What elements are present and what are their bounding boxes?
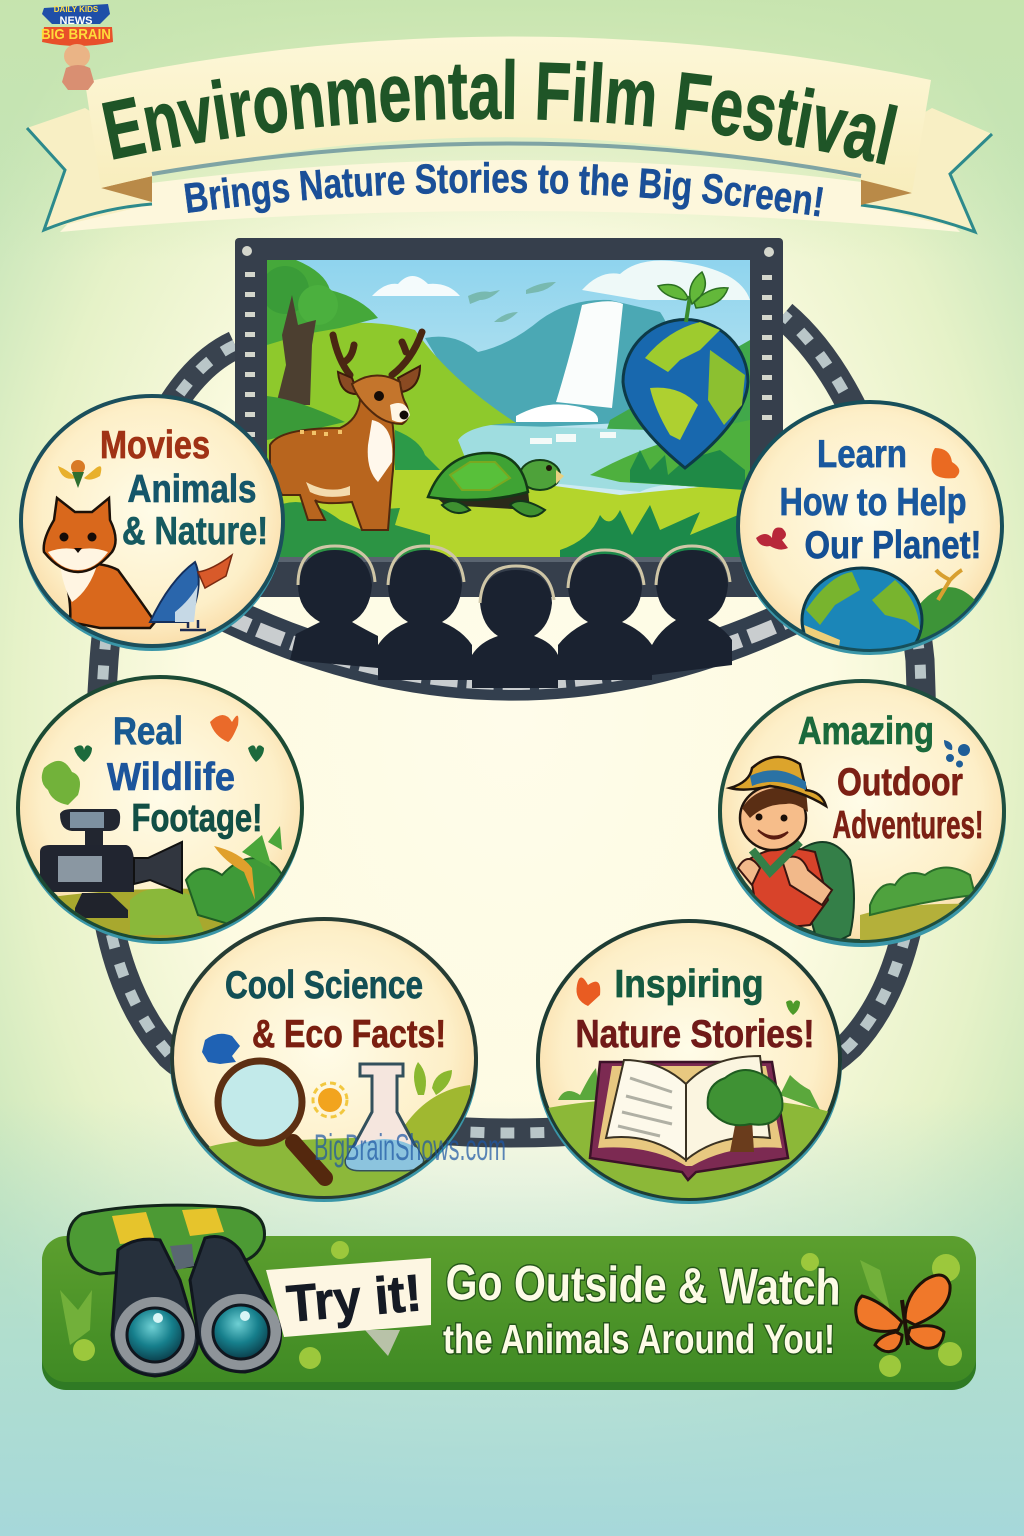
text: Learn <box>817 433 907 476</box>
turtle <box>428 453 564 516</box>
panel: learn how to help our planet <box>737 402 1003 672</box>
river <box>458 425 667 492</box>
panel: real wildlife footage: Wildlife <box>107 756 235 799</box>
icon: magnifier and flask <box>208 1058 470 1196</box>
text: Amazing <box>798 710 934 753</box>
ribbon shadow <box>152 143 861 176</box>
watermark: BigBrainShows.com <box>314 1127 506 1168</box>
logo: BIG BRAIN <box>41 26 111 43</box>
left yellow-green hill <box>267 322 516 470</box>
audience silhouettes <box>290 546 732 688</box>
panel: amazing outdoor adventures <box>718 681 1006 960</box>
header ribbon banner <box>26 36 993 235</box>
panel: cool science and eco facts <box>170 919 478 1220</box>
green band <box>42 1237 976 1390</box>
hiker head <box>730 757 826 850</box>
icon: fox and bird <box>44 460 232 630</box>
right green hill <box>607 340 750 487</box>
deer <box>270 332 422 530</box>
icon: young hiker <box>736 840 974 940</box>
foreground ferns <box>560 505 750 557</box>
icon: blue dots <box>944 740 970 768</box>
text: Inspiring <box>614 963 764 1006</box>
panel: real wildlife footage <box>17 677 303 960</box>
panel: movies animals and nature: & Nature! <box>122 510 268 553</box>
panel: amazing outdoor adventures: Outdoor <box>837 761 963 804</box>
cinema screen <box>235 238 783 688</box>
logo: DAILY KIDS <box>54 5 99 14</box>
lower film strip under the screen <box>225 613 800 682</box>
globe <box>623 272 748 468</box>
action text line one: Go Outside & Watch <box>445 1254 841 1316</box>
panel: movies animals and nature <box>20 396 284 651</box>
waterfall <box>556 301 623 408</box>
icon: orange heart <box>931 448 959 478</box>
ribbon body <box>85 36 931 193</box>
try it label: Try it! <box>284 1264 424 1334</box>
foliage <box>73 1241 962 1377</box>
panel: movies animals and nature: Animals <box>128 468 256 511</box>
icon: hearts <box>576 978 800 1015</box>
foam <box>516 404 598 422</box>
panel: inspiring nature stories <box>536 921 842 1220</box>
panel: learn how to help our planet: Our Planet! <box>804 524 982 567</box>
icon: red blob <box>756 527 788 550</box>
sprocket holes <box>242 246 774 437</box>
cream band behind subtitle <box>60 160 960 232</box>
ribbon folds <box>101 176 152 202</box>
call to action band <box>42 1205 976 1390</box>
birds <box>468 282 556 322</box>
icon: butterfly <box>856 1275 950 1352</box>
icon: blue butterfly <box>202 1034 240 1064</box>
text: Movies <box>100 424 210 467</box>
icon: leaf <box>42 761 80 805</box>
ribbon tail left <box>27 108 152 230</box>
logo <box>41 4 113 90</box>
icon: video camera <box>40 809 282 938</box>
icon: open book with tree <box>548 1055 828 1198</box>
clouds <box>372 276 460 296</box>
text: Cool Science <box>225 964 423 1007</box>
action text line two: the Animals Around You! <box>443 1316 835 1362</box>
screen bottom bar detail <box>267 557 750 562</box>
nature scene <box>261 260 750 557</box>
title: Environmental Film Festival <box>102 58 898 165</box>
left tree <box>261 260 378 440</box>
blue mountains <box>425 300 680 430</box>
panel: learn how to help our planet: How to Help <box>780 481 966 524</box>
ribbon tail right <box>861 108 992 232</box>
screen frame <box>235 238 783 597</box>
text: Real <box>113 710 183 753</box>
foreground meadow <box>267 465 750 557</box>
icon: globe and bushes <box>800 566 975 649</box>
icon: hearts <box>74 715 264 762</box>
icon: binoculars <box>68 1205 281 1376</box>
subtitle: Brings Nature Stories to the Big Screen! <box>184 162 824 216</box>
white rocks <box>530 432 616 444</box>
panel: cool science and eco facts: & Eco Facts! <box>252 1013 446 1056</box>
logo: NEWS <box>60 15 92 27</box>
panel: inspiring nature stories: Nature Stories! <box>576 1013 814 1056</box>
film strip ring <box>98 315 922 1133</box>
panel: real wildlife footage: Footage! <box>132 797 262 840</box>
